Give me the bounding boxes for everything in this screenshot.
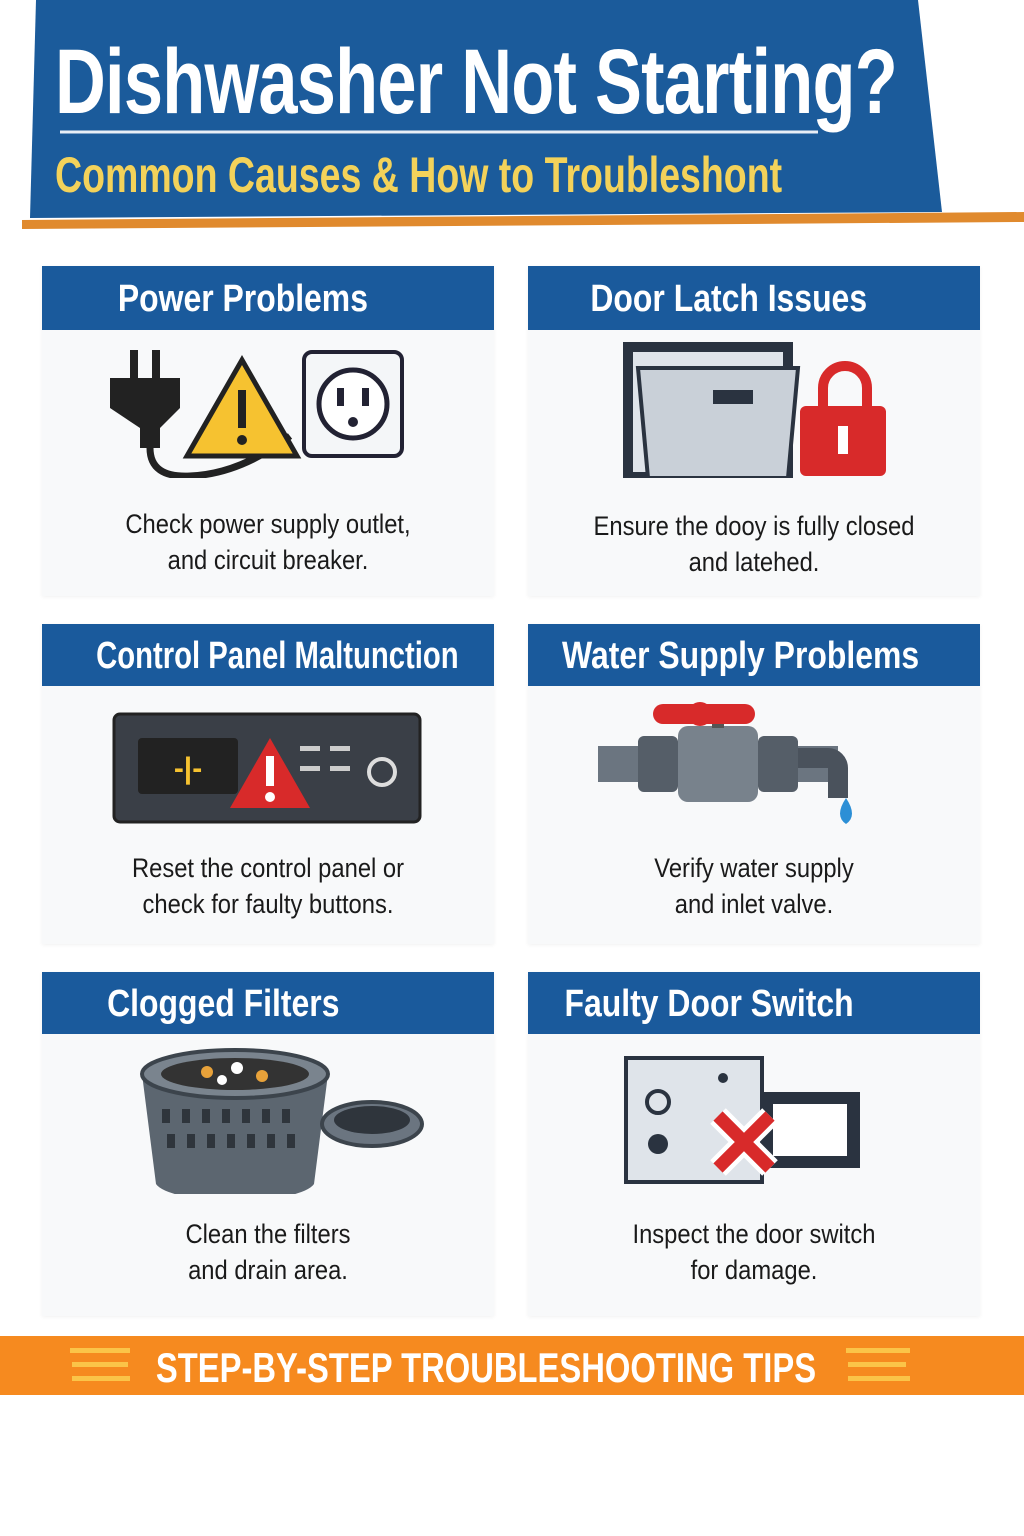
footer banner	[0, 1336, 1024, 1395]
icon: switch with x	[624, 1056, 860, 1184]
text: power: Check power supply outlet,	[125, 509, 411, 539]
panel: control panel: Control Panel Maltunction	[96, 635, 459, 677]
text: water: and inlet valve.	[675, 889, 833, 919]
icon: dishwasher lock	[623, 342, 886, 478]
icon: valve with drop	[598, 702, 852, 824]
panel: door latch	[528, 266, 980, 596]
title: Dishwasher Not Starting?	[55, 31, 897, 133]
text: filters	[185, 1219, 351, 1285]
icon: plug warning outlet	[110, 350, 404, 478]
panel: power problems	[42, 266, 494, 596]
panel: clogged filters: Clogged Filters	[107, 983, 339, 1025]
panel: water supply	[528, 624, 980, 944]
text: door: Ensure the dooy is fully closed	[594, 511, 914, 541]
panel: clogged filters	[42, 972, 494, 1316]
text: control: Reset the control panel or	[132, 853, 404, 883]
panel: control panel	[42, 624, 494, 944]
icon: control panel warning: -|-	[174, 752, 202, 785]
text: switch	[632, 1219, 876, 1285]
text: filters: and drain area.	[188, 1255, 348, 1285]
panel: faulty door switch: Faulty Door Switch	[564, 983, 854, 1025]
header banner	[22, 0, 1024, 229]
text: power: and circuit breaker.	[168, 545, 368, 575]
text: control: check for faulty buttons.	[143, 889, 393, 919]
text: control	[132, 853, 404, 919]
text: switch: for damage.	[691, 1255, 817, 1285]
text: door	[594, 511, 914, 577]
footer text: STEP-BY-STEP TROUBLESHOOTING TIPS	[156, 1344, 816, 1391]
panel: faulty door switch	[528, 972, 980, 1316]
panel: door latch: Door Latch Issues	[591, 278, 867, 320]
text: power	[125, 509, 411, 575]
icon: filter basket	[140, 1048, 424, 1194]
text: switch: Inspect the door switch	[632, 1219, 876, 1249]
text: water	[654, 853, 854, 919]
panel: power problems: Power Problems	[118, 278, 368, 320]
text: water: Verify water supply	[654, 853, 854, 883]
text: door: and latehed.	[689, 547, 819, 577]
text: filters: Clean the filters	[185, 1219, 351, 1249]
panel: water supply: Water Supply Problems	[562, 635, 919, 677]
subtitle: Common Causes & How to Troubleshont	[55, 147, 782, 203]
icon: control panel warning	[112, 712, 422, 824]
